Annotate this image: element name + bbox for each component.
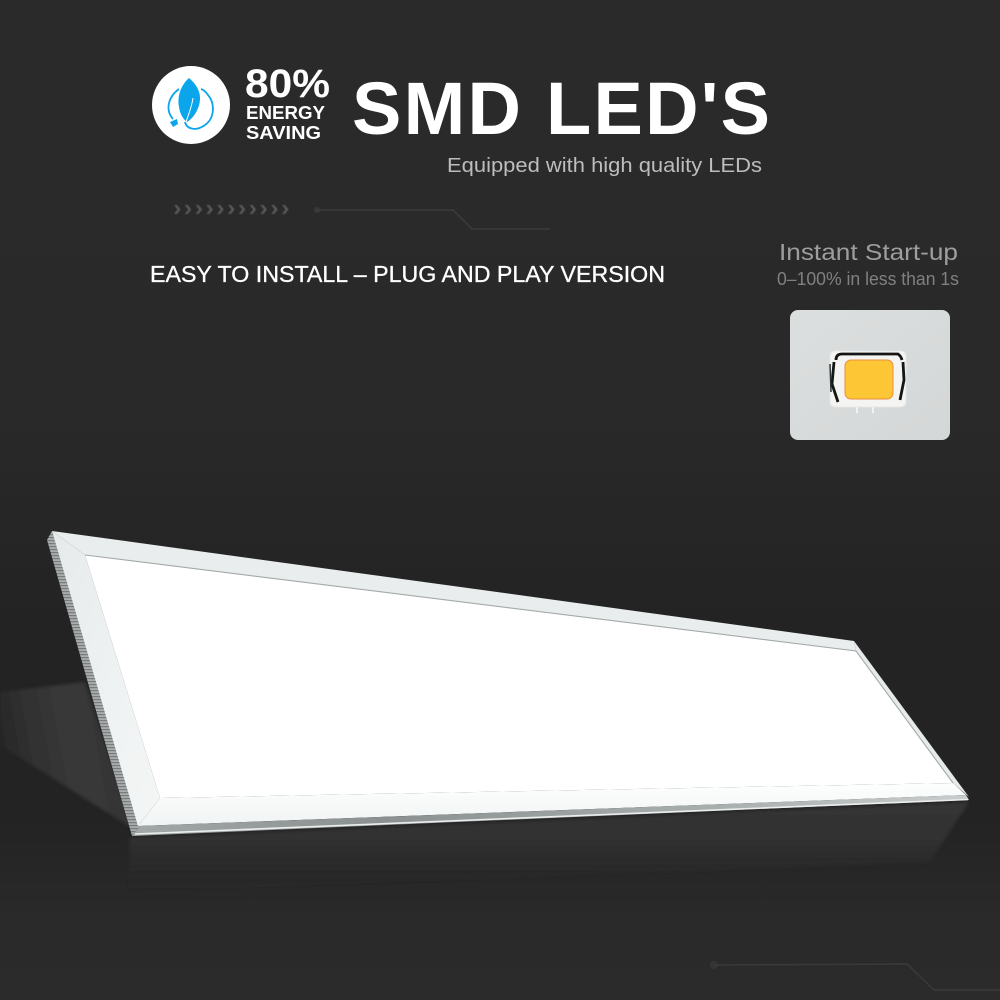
floor glow at left <box>0 682 132 828</box>
panel inner edge line <box>85 555 953 783</box>
panel right frame <box>854 641 969 797</box>
panel bottom highlight <box>135 800 968 834</box>
panel bottom edge <box>132 795 969 836</box>
title: SMD LED'S <box>352 67 770 150</box>
panel left frame <box>52 531 160 826</box>
text: saving: SAVING <box>246 122 321 143</box>
text: 80%: 80% <box>245 62 330 106</box>
decorative chevrons row <box>174 205 288 214</box>
circuit line top <box>314 207 550 229</box>
panel bottom frame <box>138 783 966 826</box>
circuit line bottom <box>710 961 1000 990</box>
icon: SMD chip <box>830 351 906 413</box>
instant start-up heading: Instant Start-up <box>779 239 958 265</box>
subtitle: Equipped with high quality LEDs <box>447 154 762 177</box>
LED chip photo card <box>790 310 950 440</box>
panel side ridges <box>47 531 140 836</box>
icon: leaf and plug in white circle <box>152 66 230 144</box>
instant start-up detail: 0–100% in less than 1s <box>777 269 959 289</box>
panel light surface <box>85 555 953 798</box>
panel reflection on floor <box>128 802 969 892</box>
text: energy: ENERGY <box>246 102 326 123</box>
badge: 80% energy saving <box>152 62 330 144</box>
panel top frame <box>52 531 856 651</box>
install headline: EASY TO INSTALL – PLUG AND PLAY VERSION <box>150 261 665 287</box>
LED panel <box>47 531 969 836</box>
